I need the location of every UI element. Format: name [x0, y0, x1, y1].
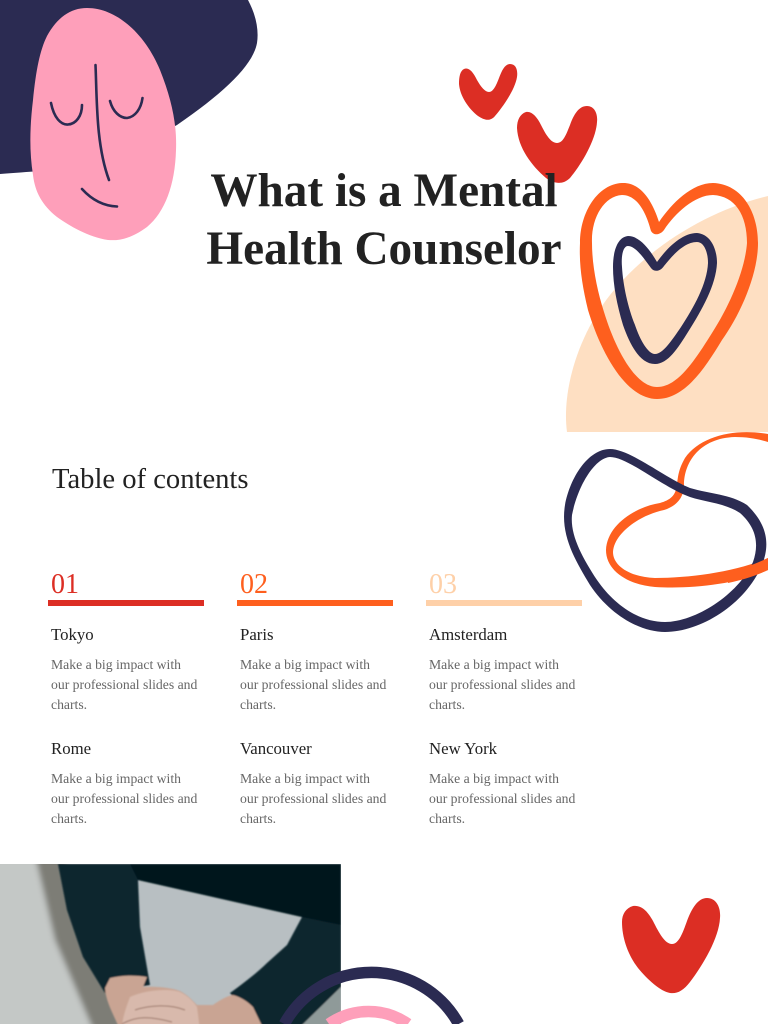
Amsterdam item: Make a big impact with	[429, 656, 559, 672]
bar 03	[426, 600, 582, 606]
Vancouver item: charts.	[240, 810, 276, 826]
Tokyo item	[51, 625, 198, 712]
New York item: Make a big impact with	[429, 770, 559, 786]
New York item: New York	[429, 739, 497, 758]
ring pink	[329, 1011, 408, 1024]
ring navy	[284, 972, 459, 1024]
New York item: charts.	[429, 810, 465, 826]
number 02: 02	[240, 569, 268, 600]
title	[206, 165, 562, 275]
bar 02	[237, 600, 393, 606]
eyes, nose and mouth	[51, 65, 142, 206]
Vancouver item	[240, 739, 386, 826]
orange loop	[606, 432, 768, 587]
Rome item: charts.	[51, 810, 87, 826]
Amsterdam item: our professional slides and	[429, 676, 575, 692]
navy hair blob	[0, 0, 258, 174]
Vancouver item: Vancouver	[240, 739, 312, 758]
Paris item: Make a big impact with	[240, 656, 370, 672]
column 01	[48, 569, 204, 826]
Tokyo item: Tokyo	[51, 625, 94, 644]
Tokyo item: our professional slides and	[51, 676, 197, 692]
Rome item: our professional slides and	[51, 790, 197, 806]
Rome item: Rome	[51, 739, 91, 758]
number 01: 01	[51, 569, 79, 600]
New York item: our professional slides and	[429, 790, 575, 806]
Tokyo item: Make a big impact with	[51, 656, 181, 672]
number 03: 03	[429, 569, 457, 600]
Amsterdam item: Amsterdam	[429, 625, 507, 644]
office photo	[0, 855, 341, 1024]
peach semicircle	[566, 196, 768, 432]
Rome item	[51, 739, 198, 826]
title: Health Counselor	[206, 223, 562, 275]
Vancouver item: Make a big impact with	[240, 770, 370, 786]
column 02	[237, 569, 393, 826]
navy loop	[564, 449, 766, 632]
small red heart	[459, 64, 517, 120]
Amsterdam item: charts.	[429, 696, 465, 712]
Paris item: charts.	[240, 696, 276, 712]
bar 01	[48, 600, 204, 606]
Rome item: Make a big impact with	[51, 770, 181, 786]
title: What is a Mental	[210, 165, 558, 217]
large red heart	[517, 106, 597, 183]
bottom red heart	[622, 898, 720, 993]
pink face	[30, 8, 176, 240]
column 03	[426, 569, 582, 826]
Paris item: Paris	[240, 625, 274, 644]
table of contents heading: Table of contents	[52, 464, 248, 495]
orange outer heart	[580, 183, 758, 399]
Paris item: our professional slides and	[240, 676, 386, 692]
Paris item	[240, 625, 386, 712]
New York item	[429, 739, 576, 826]
navy inner heart	[613, 233, 717, 364]
Vancouver item: our professional slides and	[240, 790, 386, 806]
Tokyo item: charts.	[51, 696, 87, 712]
orange loop overlap	[728, 558, 768, 583]
Amsterdam item	[429, 625, 576, 712]
